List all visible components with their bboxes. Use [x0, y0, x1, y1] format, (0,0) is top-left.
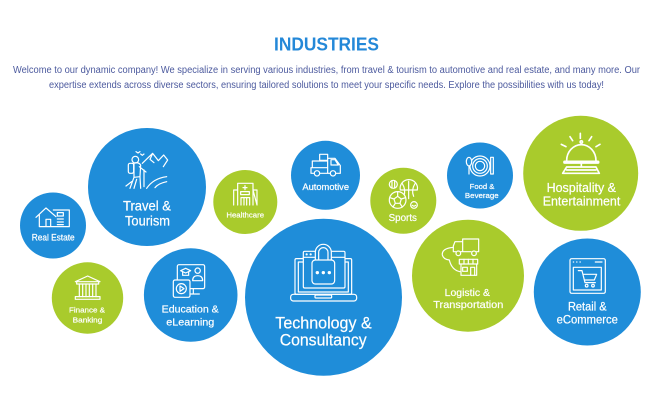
label: finance and banking — [69, 306, 105, 324]
label: education and elearning — [162, 303, 219, 328]
icon: bank — [75, 276, 100, 299]
label: sports: Sports — [389, 212, 417, 224]
panel: sports — [370, 168, 436, 234]
intro paragraph: expertise extends across diverse sectors, ensuring tailored solutions to meet your specific needs. Explore the possibilities with us today! — [49, 80, 604, 91]
label: retail and ecommerce: Retail & — [568, 302, 607, 314]
intro paragraph — [13, 65, 641, 91]
icon: laptop with padlock — [291, 244, 357, 301]
label: education and elearning: eLearning — [166, 316, 214, 328]
panel: hospitality and entertainment — [523, 116, 638, 231]
label: finance and banking: Banking — [73, 315, 102, 324]
label: hospitality and entertainment — [543, 180, 621, 208]
label: travel and tourism — [123, 199, 171, 228]
icon: truck and store route — [442, 239, 479, 275]
icon: delivery truck — [311, 154, 340, 176]
label: real estate: Real Estate — [32, 233, 75, 243]
title: INDUSTRIES — [274, 34, 379, 54]
icon: plate and cutlery — [466, 156, 493, 176]
panel: travel and tourism — [88, 128, 206, 246]
label: food and beverage — [465, 182, 499, 200]
panel: logistic and transportation — [412, 220, 524, 332]
label: logistic and transportation — [433, 287, 503, 311]
icon: house and building — [36, 208, 69, 227]
icon: hospital — [234, 183, 257, 205]
panel: education and elearning — [144, 248, 238, 342]
label: logistic and transportation: Logistic & — [445, 287, 490, 299]
label: finance and banking: Finance & — [69, 306, 105, 315]
icon: shopping cart in browser — [570, 259, 605, 293]
label: hospitality and entertainment: Entertainment — [543, 193, 621, 208]
label: automotive: Automotive — [302, 181, 349, 192]
label: technology and consultancy: Consultancy — [280, 331, 367, 349]
panel: healthcare — [213, 170, 277, 234]
icon: online learning screen — [173, 265, 205, 297]
label: food and beverage: Food & — [470, 182, 494, 191]
icon: hiker and mountains — [126, 152, 168, 188]
icon: sports balls — [389, 180, 417, 208]
icon: service bell — [561, 133, 600, 173]
label: retail and ecommerce — [557, 302, 618, 326]
label: technology and consultancy: Technology & — [275, 314, 372, 332]
label: logistic and transportation: Transportation — [433, 299, 503, 311]
label: food and beverage: Beverage — [465, 191, 499, 200]
panel: retail and ecommerce — [534, 238, 641, 346]
label: technology and consultancy — [275, 314, 372, 349]
panel: technology and consultancy — [245, 219, 402, 376]
panel: finance and banking — [52, 262, 123, 334]
label: travel and tourism: Tourism — [125, 213, 170, 228]
label: retail and ecommerce: eCommerce — [557, 314, 618, 326]
panel: real estate — [20, 192, 86, 258]
panel: automotive — [291, 141, 360, 210]
label: healthcare: Healthcare — [226, 210, 264, 219]
label: education and elearning: Education & — [162, 303, 219, 315]
intro paragraph: Welcome to our dynamic company! We specialize in serving various industries, from travel & tourism to automotive and real estate, and many more. Our — [13, 65, 641, 76]
panel: food and beverage — [447, 142, 513, 208]
label: travel and tourism: Travel & — [123, 199, 171, 214]
label: hospitality and entertainment: Hospitality & — [547, 180, 616, 195]
